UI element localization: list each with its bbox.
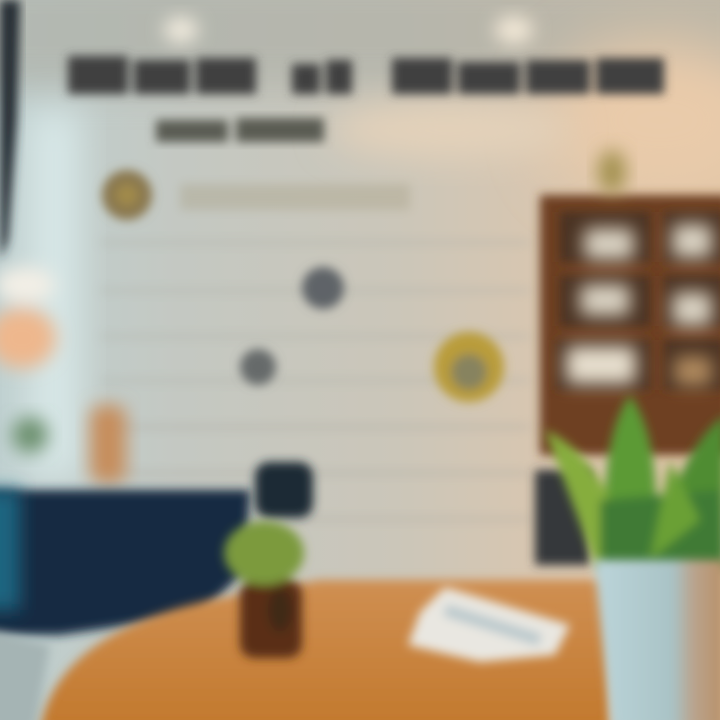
bookshelf xyxy=(535,150,720,565)
wall slat stripes xyxy=(100,184,530,522)
white plant pot xyxy=(594,560,720,720)
small potted plant xyxy=(224,521,304,658)
blurred subtitle xyxy=(156,118,324,142)
lamp glow xyxy=(0,267,56,368)
left dark edge xyxy=(0,0,20,260)
dark navy sofa xyxy=(0,462,313,720)
blurred title xyxy=(68,56,664,94)
ceiling lights xyxy=(164,16,533,44)
icon: small slate circle xyxy=(240,349,276,385)
papers on table xyxy=(408,587,570,662)
wooden table xyxy=(40,580,610,720)
icon: brown circle xyxy=(102,170,152,220)
icon: slate circle xyxy=(302,267,344,309)
large plant xyxy=(545,395,720,570)
left decor: plant and vase xyxy=(12,405,126,483)
icon: yellow circle xyxy=(434,332,504,402)
